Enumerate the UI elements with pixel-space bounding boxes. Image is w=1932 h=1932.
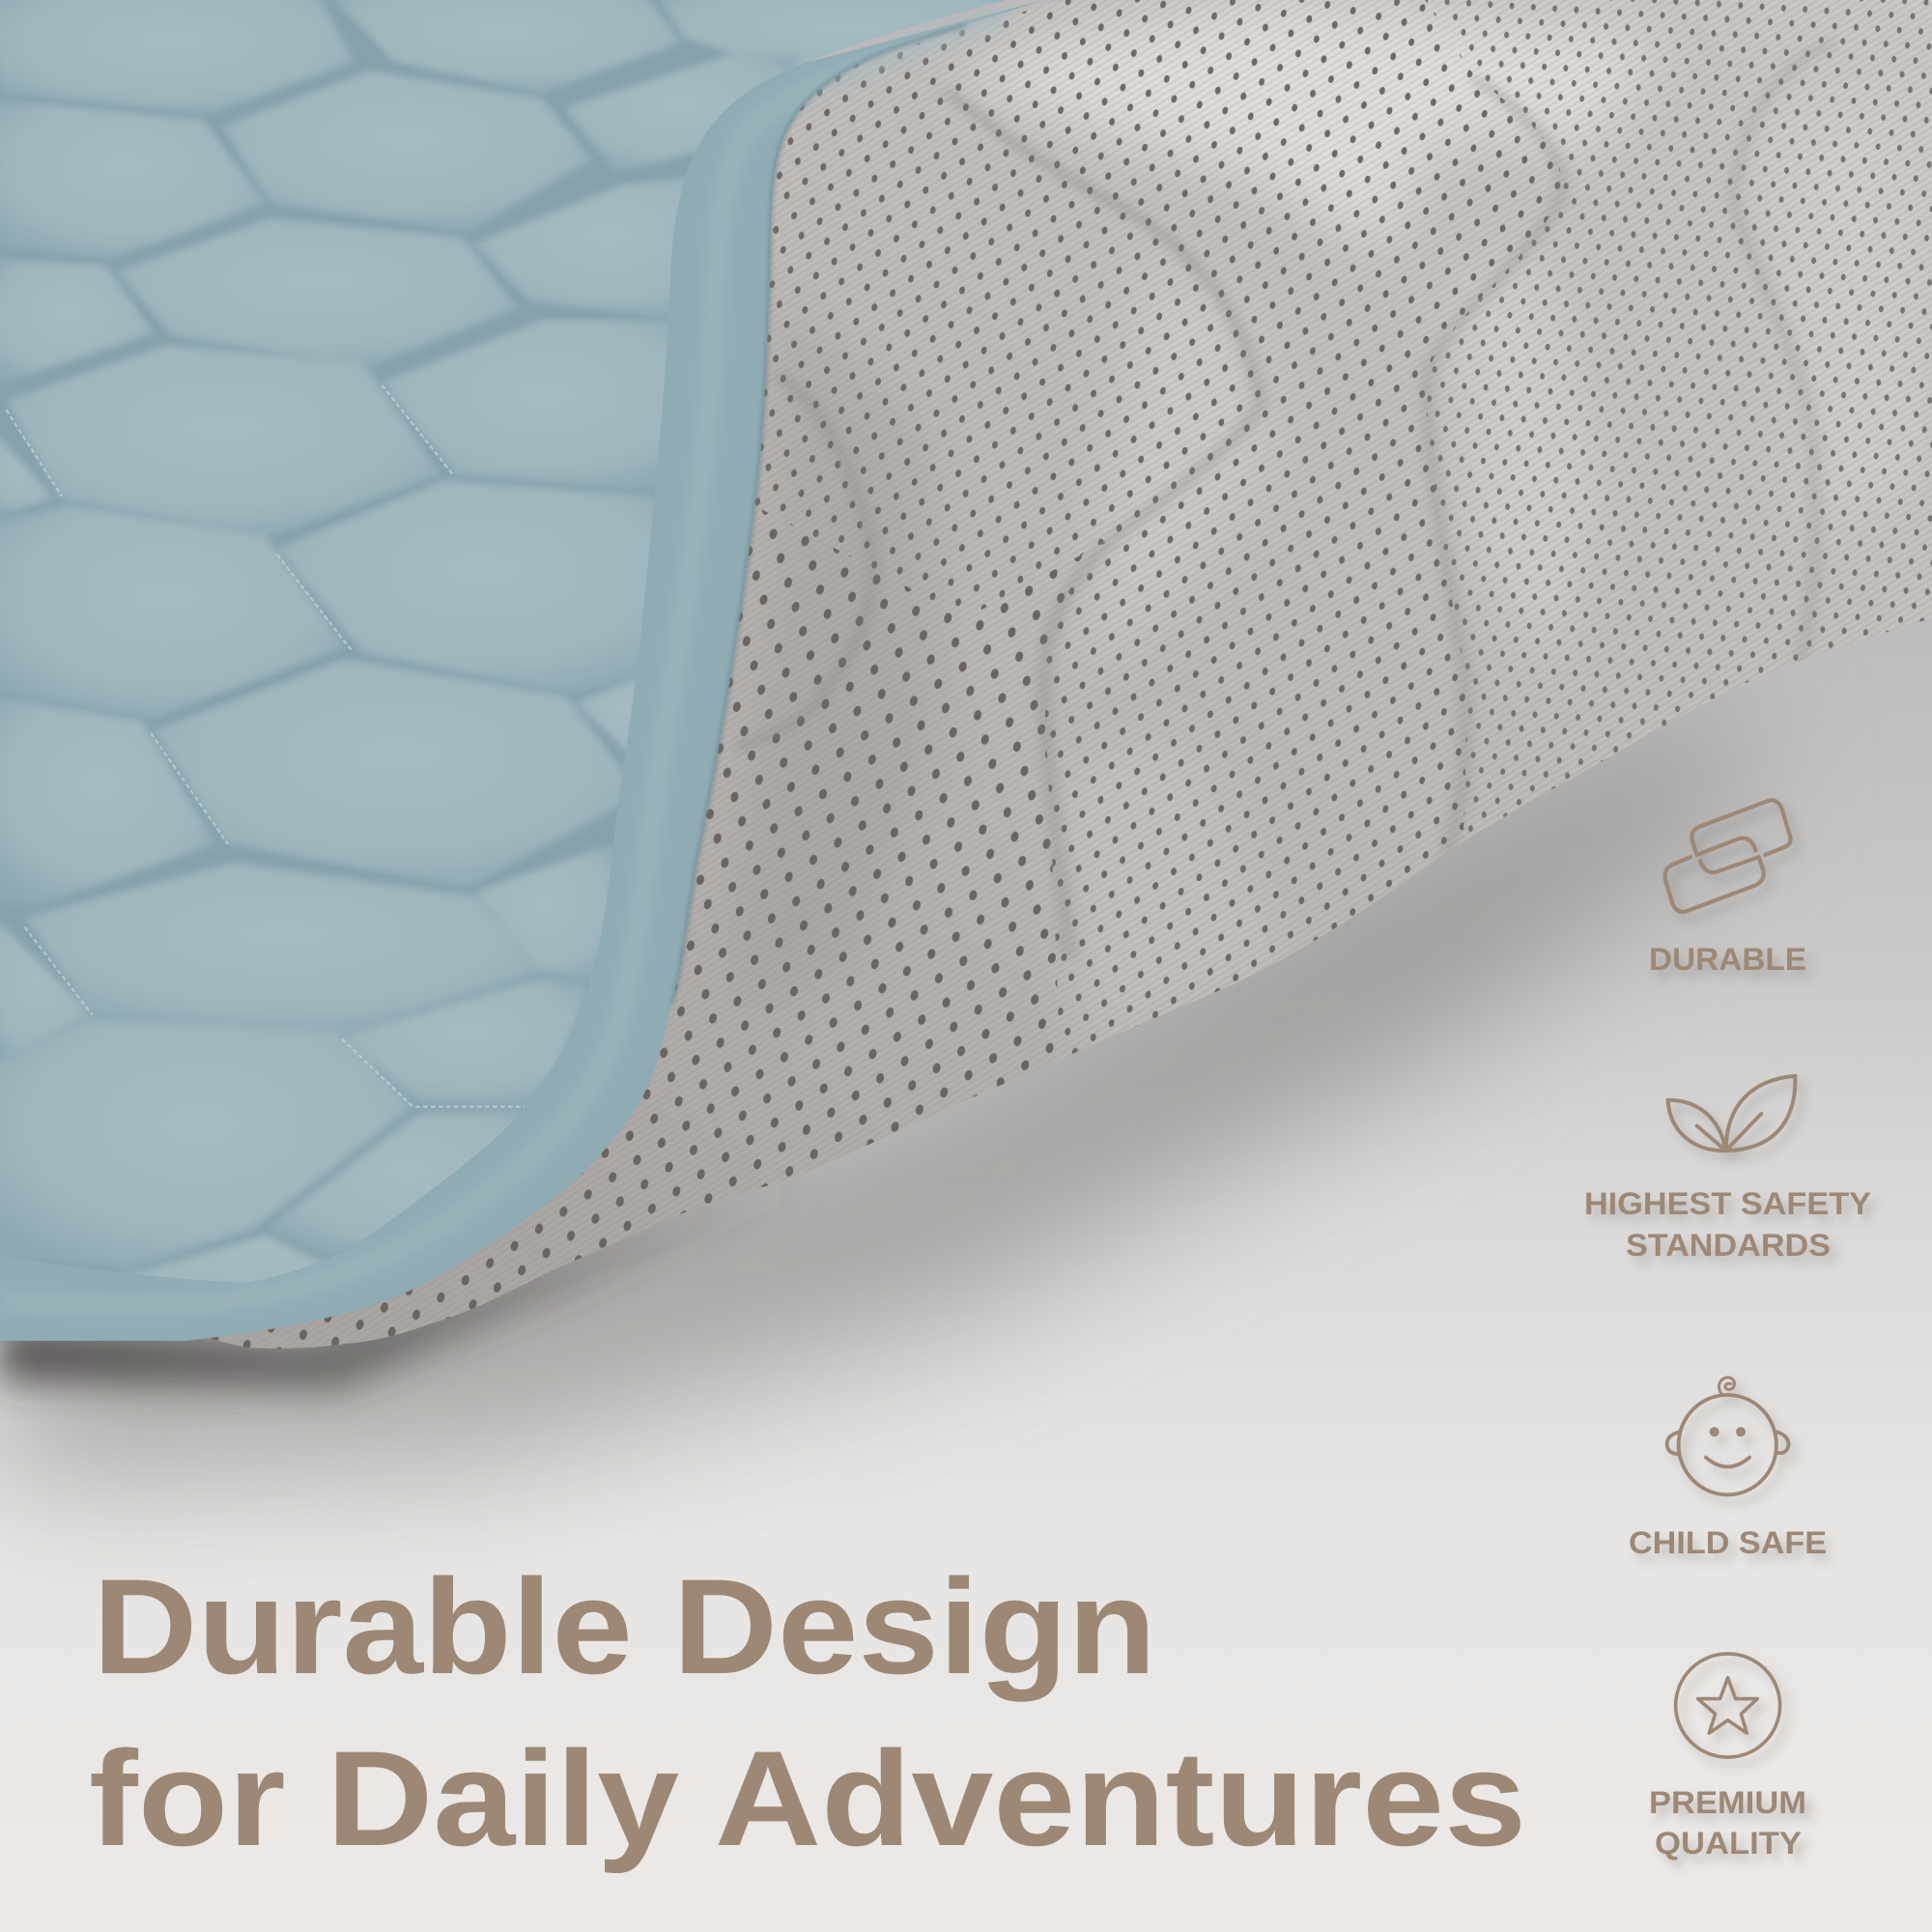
cast shadow under mat: [0, 696, 1739, 1478]
feature: highest safety standards: [1584, 1076, 1871, 1263]
mat binding edge: [0, 0, 1044, 1341]
label: quality: QUALITY: [1655, 1826, 1802, 1861]
mat top: quilted hexagon surface: [0, 0, 1063, 1352]
feature: premium quality: [1649, 1654, 1806, 1861]
label: child safe: CHILD SAFE: [1629, 1525, 1827, 1560]
label: durable: DURABLE: [1649, 942, 1806, 977]
anti-slip dots upper corner puff: [755, 43, 1260, 611]
anti-slip dots far panel: [1425, 0, 1932, 833]
title line 2: for Daily Adventures: [89, 1722, 1526, 1874]
underside base fabric: [145, 0, 1932, 1372]
hexagon cells upper: [0, 0, 1047, 980]
seam base: [0, 0, 1063, 1352]
label: premium: PREMIUM: [1649, 1785, 1806, 1820]
mat underside: grey anti-slip fabric: [145, 0, 1932, 1372]
fabric twill texture: [773, 0, 1932, 1034]
quilting seams: [740, 43, 1830, 955]
binding edge stitching: [671, 25, 966, 1005]
anti-slip dots near corner: [211, 510, 1105, 1349]
icon: baby face: [1667, 1378, 1789, 1494]
icon: star in circle: [1676, 1654, 1780, 1757]
label: standards: STANDARDS: [1626, 1228, 1831, 1263]
label: highest safety: HIGHEST SAFETY: [1584, 1186, 1871, 1221]
feature: durable: [1649, 801, 1806, 977]
title: [89, 1550, 1526, 1874]
title line 1: Durable Design: [93, 1550, 1156, 1702]
icon: chain links: [1665, 801, 1791, 912]
icon: leaves: [1668, 1076, 1795, 1151]
anti-slip dots middle panel: [949, 0, 1561, 1054]
quilted puff shading: [734, 0, 1922, 1063]
binding band: [0, 0, 1044, 1341]
feature: child safe: [1629, 1378, 1827, 1560]
binding highlight: [0, 14, 1005, 1306]
hexagon cells lower: [0, 842, 616, 1344]
quilting stitch lines: [6, 385, 530, 1107]
